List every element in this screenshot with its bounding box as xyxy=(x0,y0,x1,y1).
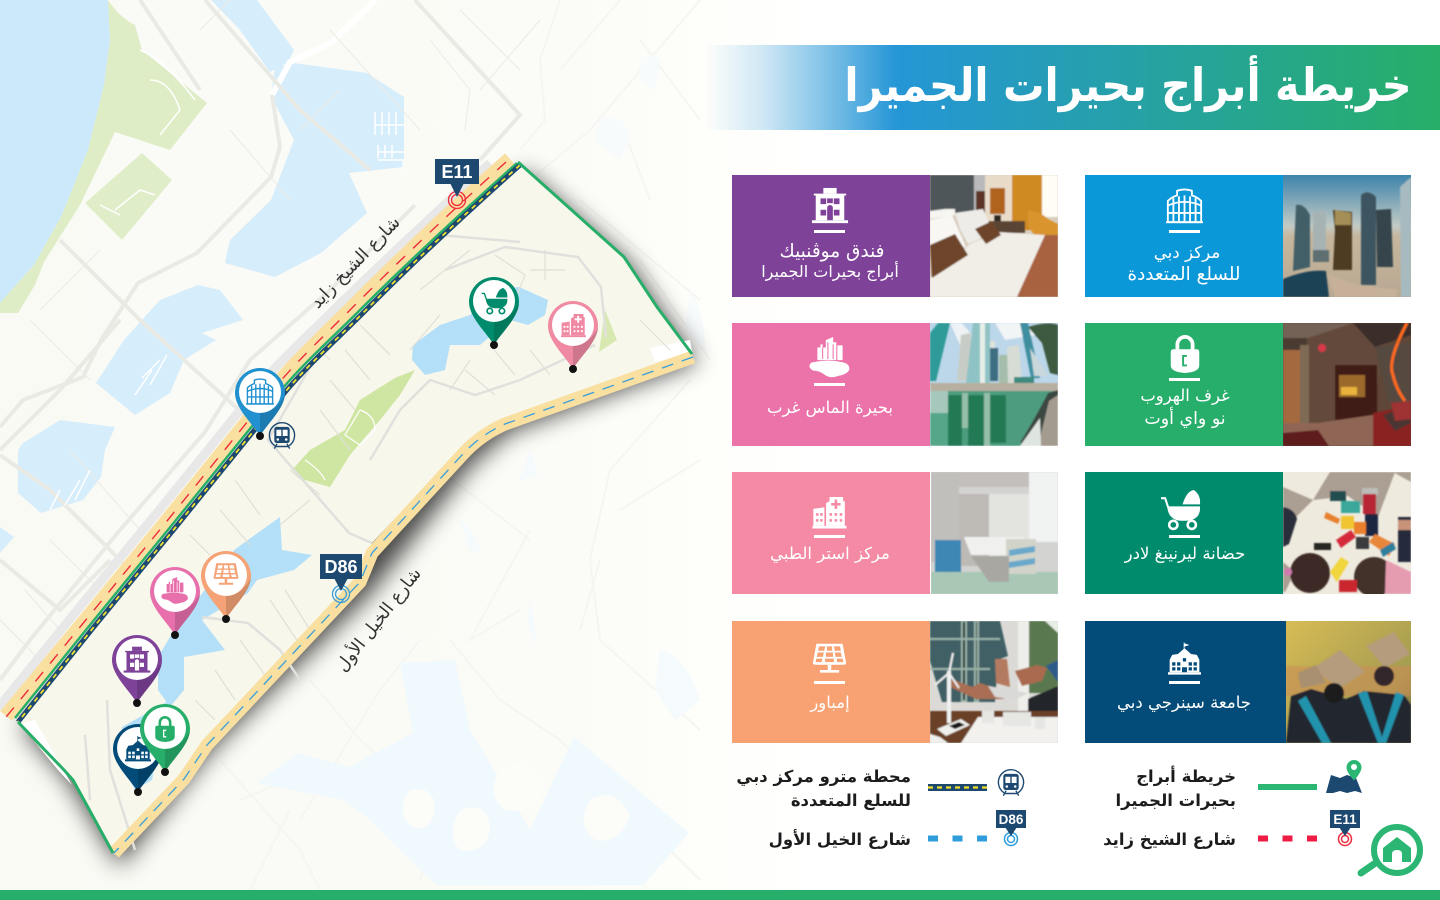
text: Almas: بحيرة الماس غرب xyxy=(767,398,893,418)
title text: خريطة أبراج بحيرات الجميرا xyxy=(844,55,1412,113)
icon: lock xyxy=(1171,337,1199,373)
icon: lake towers xyxy=(809,337,849,377)
legend xyxy=(736,760,1362,850)
photo: graduates xyxy=(1286,621,1411,743)
legend: Sheikh Zayed: شارع الشيخ زايد xyxy=(1103,830,1236,850)
beach green strip xyxy=(0,0,207,313)
panel: escape rooms xyxy=(1085,323,1411,446)
panel: Lake Almas West xyxy=(732,323,1058,446)
photo: escape room xyxy=(1283,323,1411,446)
red dashes xyxy=(2,162,506,722)
park paths xyxy=(100,50,195,215)
creek water xyxy=(0,0,404,553)
panel: university xyxy=(1085,621,1411,743)
pin: empower xyxy=(201,551,251,623)
marina combs xyxy=(50,112,405,510)
sign: E11 xyxy=(435,159,479,208)
district shadow xyxy=(23,171,698,866)
legend: boundary xyxy=(1115,760,1362,811)
pin: university xyxy=(113,724,163,796)
text: escape rooms: نو واي أوت xyxy=(1144,407,1226,429)
inner roads xyxy=(85,235,606,850)
pin: metro station xyxy=(269,423,295,449)
panel: nursery xyxy=(1085,472,1411,597)
text: university: جامعة سينرجي دبي xyxy=(1117,693,1251,713)
icon: hotel xyxy=(812,188,848,223)
text: Empower: إمباور xyxy=(809,693,850,713)
icon: mall xyxy=(1166,189,1203,222)
pin: lake west xyxy=(150,567,200,639)
eastern water xyxy=(257,660,689,885)
icon: university xyxy=(1168,642,1201,675)
logo: magnifier with house xyxy=(1361,827,1420,873)
legend: Al Khail: شارع الخيل الأول xyxy=(769,829,911,850)
arterial grey roads xyxy=(0,0,520,680)
panel: Movenpick hotel xyxy=(732,175,1058,297)
inner streets xyxy=(190,250,670,720)
label: Sheikh Zayed Road: شارع الشيخ زايد xyxy=(307,213,405,313)
legend: metro: للسلع المتعددة xyxy=(791,791,911,811)
photo: hospital xyxy=(931,472,1058,594)
text: DMCC: مركز دبي xyxy=(1154,242,1220,263)
pin: escape rooms xyxy=(140,704,190,776)
legend: metro: محطة مترو مركز دبي xyxy=(736,767,911,787)
pin: nursery xyxy=(469,277,519,349)
title banner xyxy=(705,45,1440,130)
icon: stroller xyxy=(1161,490,1200,529)
pin: medical centre xyxy=(548,301,598,373)
photo: toys xyxy=(1283,472,1411,594)
text: DMCC: للسلع المتعددة xyxy=(1127,264,1241,285)
text: hotel: فندق موڤنبيك xyxy=(779,241,885,262)
photo: hotel room xyxy=(930,175,1058,297)
text: hotel: أبراج بحيرات الجميرا xyxy=(761,261,899,282)
sea xyxy=(0,0,110,303)
metro line xyxy=(18,165,520,722)
lower lake xyxy=(158,517,312,707)
pin: multi commodities centre xyxy=(235,368,285,440)
icon: solar panel xyxy=(813,644,846,673)
inner white junction xyxy=(20,720,72,785)
legend: metro xyxy=(736,767,1024,811)
photo: wind model xyxy=(930,621,1058,743)
panel: Empower xyxy=(732,621,1058,743)
icon: hospital xyxy=(812,497,846,528)
legend: boundary: بحيرات الجميرا xyxy=(1115,791,1236,811)
eastern faded street network xyxy=(120,0,710,890)
upper road E11 xyxy=(0,159,520,722)
legend: boundary: خريطة أبراج xyxy=(1136,766,1236,787)
pin: hotel xyxy=(112,635,162,707)
upper lake xyxy=(412,287,548,375)
legend: Al Khail: D86 xyxy=(999,812,1024,827)
photo: towers xyxy=(1283,175,1411,297)
text: nursery: حضانة ليرنينغ لادر xyxy=(1124,544,1245,564)
district boundary xyxy=(18,162,692,853)
lower road Al Khail xyxy=(114,357,693,853)
district area xyxy=(18,162,693,855)
green boundary xyxy=(15,163,517,718)
park: south xyxy=(85,153,172,240)
footer bar xyxy=(0,890,1440,900)
text: medical: مركز استر الطبي xyxy=(770,544,890,564)
photo: lake xyxy=(930,323,1058,446)
panel: medical centre xyxy=(732,472,1058,594)
legend: Sheikh Zayed: E11 xyxy=(1333,812,1357,827)
inner park xyxy=(292,370,415,487)
sign: D86: D86 xyxy=(324,557,358,577)
white arterial xyxy=(272,0,375,95)
legend: Al Khail xyxy=(769,810,1026,850)
panel: DMCC xyxy=(1085,175,1411,297)
legend: Sheikh Zayed xyxy=(1103,810,1360,850)
text: escape rooms: غرف الهروب xyxy=(1140,386,1230,406)
label: Al Khail Road: شارع الخيل الأول xyxy=(331,563,426,676)
sign: E11: E11 xyxy=(441,162,473,182)
sign: D86 xyxy=(320,554,362,602)
